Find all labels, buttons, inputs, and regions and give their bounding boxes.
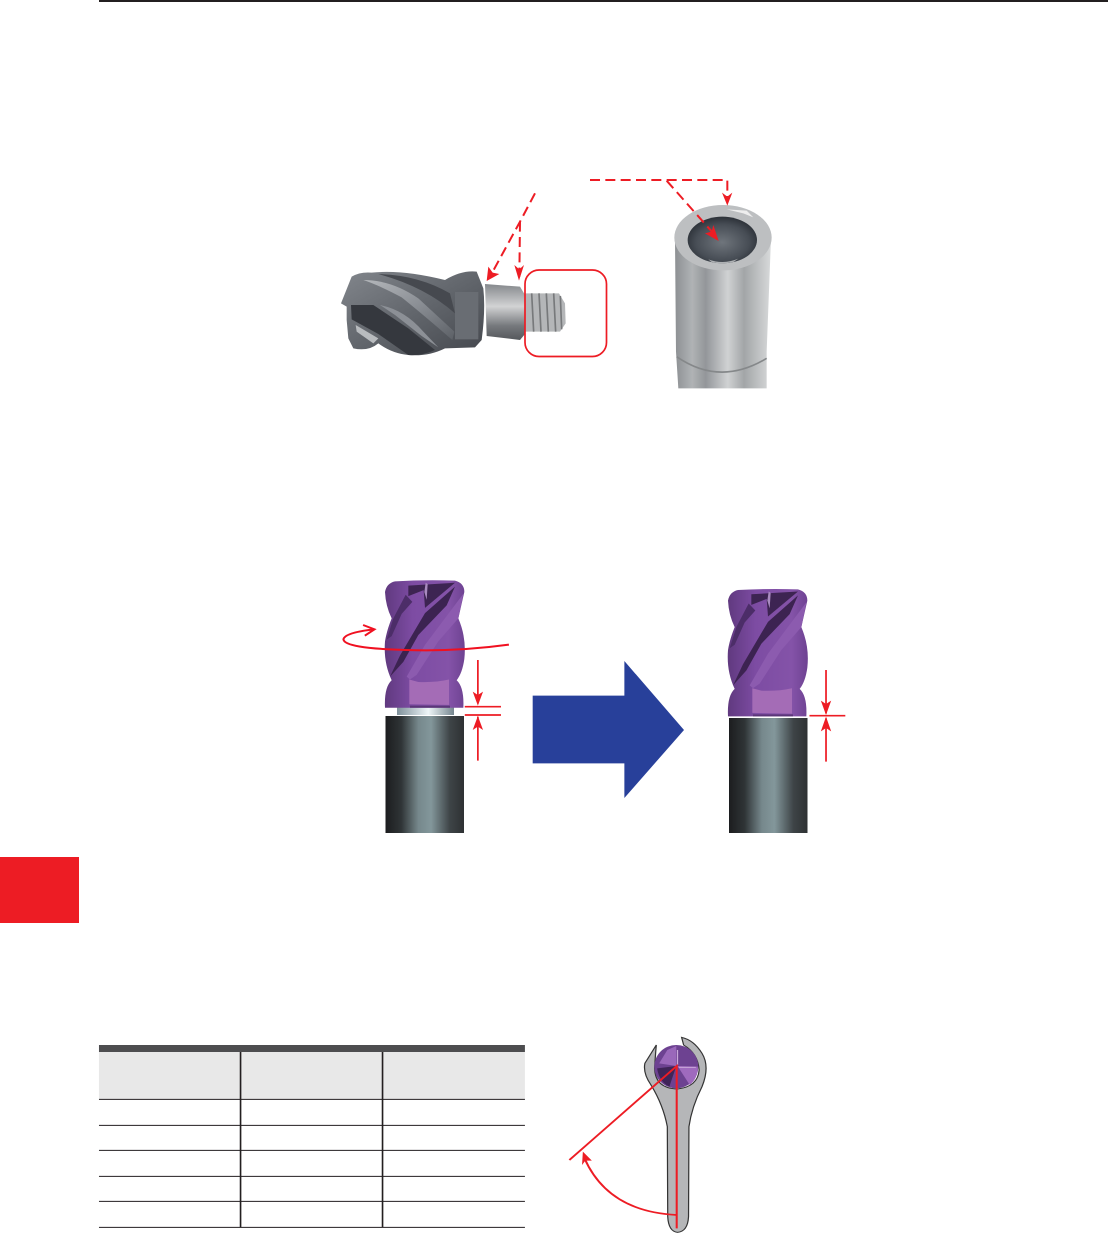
panel: torque table and wrench <box>99 1037 706 1232</box>
icon: wrench on cutter <box>644 1037 706 1232</box>
icon: shank right <box>729 718 808 833</box>
panel: tightening before and after <box>343 580 845 833</box>
icon: neck left <box>397 707 454 715</box>
top rule <box>99 0 1108 2</box>
arrow: rotation direction <box>343 625 509 650</box>
callout: rounded red frame <box>525 270 606 356</box>
icon: purple cutter right <box>728 589 808 716</box>
icon: shank left <box>386 716 464 833</box>
arrows: dashed red leaders <box>487 180 732 281</box>
arrow: wrench angle <box>569 1066 677 1228</box>
arrow: blue transition arrow <box>533 661 684 798</box>
icon: insert cutter with thread <box>341 271 566 355</box>
table <box>99 1045 525 1227</box>
red side tab <box>0 857 79 923</box>
icon: purple cutter left <box>385 580 465 708</box>
panel: insert thread and holder socket <box>341 180 772 388</box>
arrow: gap dimension right <box>809 670 845 762</box>
icon: holder socket <box>674 205 772 388</box>
arrow: gap dimension left <box>465 660 501 761</box>
